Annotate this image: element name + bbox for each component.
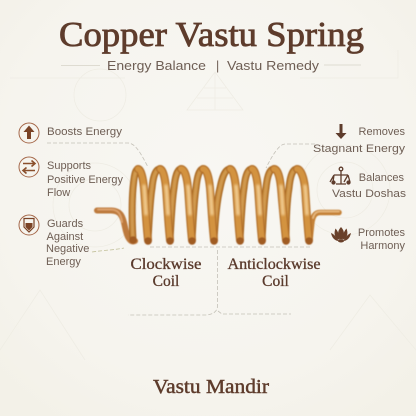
icon: shield [19, 215, 39, 235]
left labels [46, 126, 123, 268]
copper spring coil [97, 169, 339, 241]
label: supports positive energy flow [47, 160, 123, 199]
clockwise coil label: Clockwise [130, 256, 202, 273]
anticlockwise coil label: Anticlockwise [228, 256, 321, 273]
icon: up arrow [19, 123, 39, 143]
label: removes stagnant energy: Removes [359, 126, 405, 138]
label: supports positive energy flow: Positive Energy [47, 174, 123, 186]
icon: lotus [331, 227, 351, 242]
icon: exchange arrows [19, 157, 39, 177]
subtitle: Energy Balance [107, 59, 206, 73]
label: balances vastu doshas [332, 172, 407, 200]
coil labels [130, 256, 321, 290]
icon: down arrow [336, 124, 346, 139]
clockwise coil label: Coil [153, 273, 179, 290]
brand name: Vastu Mandir [153, 377, 270, 398]
faint vastu line art [0, 50, 416, 360]
label: supports positive energy flow: Supports [47, 160, 92, 172]
label: guards against negative energy [46, 218, 89, 268]
label: boosts energy: Boosts Energy [47, 126, 123, 138]
title: Copper Vastu Spring [59, 16, 364, 54]
label: guards against negative energy: Energy [46, 256, 81, 268]
subtitle: Vastu Remedy [227, 59, 320, 73]
label: removes stagnant energy [313, 126, 406, 155]
front strands [138, 169, 309, 240]
anticlockwise coil label [228, 256, 321, 290]
label: promotes harmony: Promotes [358, 227, 405, 239]
label: balances vastu doshas: Balances [359, 172, 404, 184]
ground shadow [130, 244, 315, 248]
callout lines [47, 143, 315, 315]
back strands [132, 169, 297, 240]
label: promotes harmony: Harmony [360, 240, 405, 252]
subtitle: | [216, 59, 219, 73]
label: guards against negative energy: Guards [47, 218, 84, 230]
front strand highlights [144, 186, 307, 214]
right lead [310, 212, 339, 240]
label: supports positive energy flow: Flow [47, 187, 70, 199]
label: balances vastu doshas: Vastu Doshas [332, 188, 407, 200]
anticlockwise coil label: Coil [262, 273, 289, 290]
icon: balance scales [330, 167, 350, 184]
label: guards against negative energy: Against [46, 231, 83, 243]
label: promotes harmony [358, 227, 405, 252]
clockwise coil label [130, 256, 202, 290]
coil bottom tips [133, 240, 309, 241]
left lead [97, 210, 135, 241]
subtitle [61, 59, 361, 73]
label: removes stagnant energy: Stagnant Energy [313, 143, 406, 155]
label: guards against negative energy: Negative [46, 243, 89, 255]
right labels [313, 126, 407, 252]
